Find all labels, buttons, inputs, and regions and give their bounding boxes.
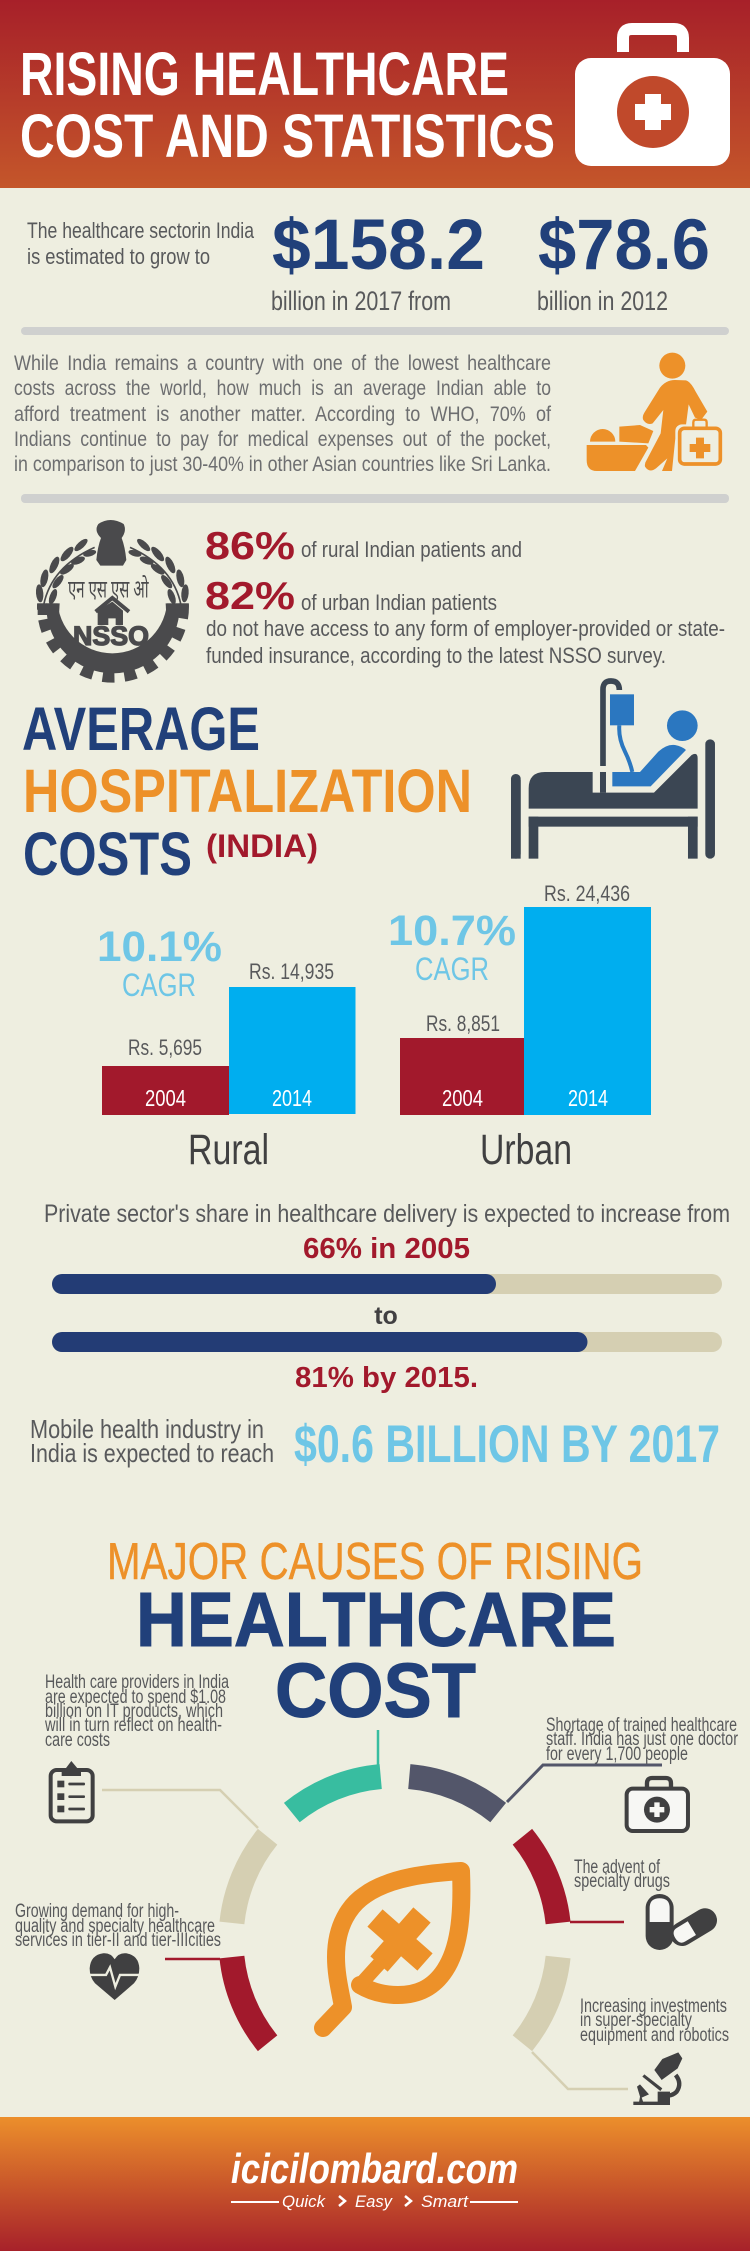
bar chart: urban hospitalization cost: 2014: [568, 1085, 608, 1111]
text: IT products cause: [44, 1672, 229, 1751]
bar chart: rural hospitalization cost: CAGR: [122, 967, 196, 1003]
icon: NSSO logo: NSSO: [73, 621, 149, 651]
tagline: [231, 2192, 518, 2211]
bar chart: urban hospitalization cost: CAGR: [415, 951, 489, 987]
heading: average hospitalization costs: HOSPITALIZATION: [23, 757, 472, 825]
tagline: Easy: [355, 2192, 393, 2211]
text: IT products cause: care costs: [45, 1730, 110, 1751]
text block: healthcare sector growth: billion in 2017 from: [271, 286, 451, 316]
icon: state emblem: [96, 520, 126, 566]
text: growing demand cause: [15, 1901, 221, 1951]
bar chart: urban hospitalization cost: Urban: [480, 1126, 572, 1174]
bar chart: urban hospitalization cost: [388, 881, 651, 1174]
text block: mobile health industry: Mobile health industry in: [30, 1414, 264, 1444]
text block: healthcare sector growth: The healthcare sectorin India: [27, 218, 255, 243]
text block: NSSO insurance statistics: 86%: [205, 525, 295, 568]
text: investments cause: in super-specialty: [580, 2010, 692, 2031]
text: IT products cause: Health care providers in India: [45, 1672, 229, 1693]
text: to: to: [374, 1302, 398, 1330]
panel: footer banner: [0, 2117, 750, 2251]
stat: 66% in 2005: 66% in 2005: [303, 1233, 470, 1265]
bar chart: rural hospitalization cost: Rural: [188, 1126, 269, 1174]
tagline: Quick: [282, 2192, 326, 2211]
bar chart: urban hospitalization cost: 10.7%: [388, 907, 516, 955]
text: investments cause: [580, 1996, 729, 2046]
bar chart: rural hospitalization cost: 2014: [272, 1085, 312, 1111]
diagram: ring of six causes: [102, 1730, 662, 2089]
text block: NSSO insurance statistics: 82%: [205, 575, 295, 618]
bar chart: urban hospitalization cost: 2004: [442, 1085, 483, 1111]
text block: NSSO insurance statistics: of urban Indian patients: [301, 590, 497, 615]
bar chart: rural hospitalization cost: 2004: [145, 1085, 186, 1111]
title: [20, 40, 555, 170]
progress bar: 81 percent: [52, 1332, 722, 1352]
text block: out of pocket paragraph: afford treatment is another matter. According to WHO, 70% of: [14, 403, 551, 426]
text block: mobile health industry: [30, 1414, 720, 1474]
wreath right: [128, 537, 189, 605]
segment: tan, investments: [522, 1957, 628, 2089]
panel: header banner: [0, 0, 750, 188]
brand name: icicilombard.com: [231, 2145, 518, 2192]
segment: red, tier cities demand: [165, 1957, 268, 2043]
icon: first aid case: [575, 29, 730, 166]
icon: person carrying medical case: [587, 353, 724, 471]
icon: pills: [646, 1894, 721, 1950]
text: specialty drugs cause: specialty drugs: [574, 1871, 670, 1892]
text: specialty drugs cause: The advent of: [574, 1857, 661, 1878]
text block: out of pocket paragraph: [14, 352, 551, 476]
stat: 81% by 2015: 81% by 2015.: [295, 1362, 478, 1394]
text block: mobile health industry: India is expected to reach: [30, 1438, 274, 1468]
text: growing demand cause: services in tier-II and tier-IIIcities: [15, 1930, 221, 1951]
bar chart: urban hospitalization cost: Rs. 24,436: [544, 881, 630, 906]
text: growing demand cause: Growing demand for high-: [15, 1901, 179, 1922]
heading: average hospitalization costs: AVERAGE: [22, 695, 260, 763]
text block: healthcare sector growth: is estimated to grow to: [27, 244, 210, 269]
heading: average hospitalization costs: [22, 695, 472, 888]
text block: out of pocket paragraph: costs across the world, how much is an average Indian able to: [14, 377, 551, 400]
text: doctor shortage cause: for every 1,700 people: [546, 1744, 688, 1765]
icon: medical kit: [627, 1778, 688, 1831]
icon: patient in hospital bed: [511, 681, 715, 859]
text block: NSSO insurance statistics: of rural Indian patients and: [301, 537, 522, 562]
text block: healthcare sector growth: [27, 206, 710, 316]
heading: major causes of rising healthcare cost: COST: [275, 1648, 476, 1734]
heading: major causes of rising healthcare cost: [107, 1533, 643, 1734]
text block: NSSO insurance statistics: funded insurance, according to the latest NSSO survey.: [206, 643, 666, 668]
text: IT products cause: are expected to spend $1.08: [45, 1687, 226, 1708]
wreath left: [35, 537, 97, 605]
text block: healthcare sector growth: billion in 2012: [537, 286, 668, 316]
icon: heart with pulse: [90, 1953, 139, 2000]
icon: leaf with medical cross: [323, 1871, 461, 2028]
text: specialty drugs cause: [574, 1857, 670, 1892]
tagline: Smart: [421, 2192, 469, 2211]
segment: slate, doctor shortage: [409, 1765, 662, 1813]
text block: healthcare sector growth: $78.6: [538, 206, 710, 285]
bar chart: rural hospitalization cost: 10.1%: [97, 923, 222, 971]
segment: teal, IT spending: [292, 1730, 381, 1813]
icon: NSSO logo: एन एस एस ओ: [68, 575, 149, 603]
icon: NSSO logo: [35, 520, 189, 678]
segment: tan, IT providers: [102, 1790, 268, 1923]
title: RISING HEALTHCARE: [20, 40, 509, 108]
bar chart: rural hospitalization cost: Rs. 5,695: [128, 1035, 202, 1060]
heading: average hospitalization costs: (INDIA): [206, 828, 318, 864]
bar chart: rural hospitalization cost: Rs. 14,935: [249, 959, 334, 984]
text: IT products cause: will in turn reflect on health-: [44, 1715, 222, 1736]
heading: major causes of rising healthcare cost: HEALTHCARE: [136, 1577, 616, 1663]
text: IT products cause: billion on IT products, which: [45, 1701, 223, 1722]
title: COST AND STATISTICS: [20, 102, 555, 170]
bar chart: urban hospitalization cost: Rs. 8,851: [426, 1011, 500, 1036]
icon: clipboard: [51, 1761, 93, 1821]
text block: out of pocket paragraph: While India remains a country with one of the lowest healthcare: [14, 352, 551, 375]
icon: house: [96, 598, 129, 625]
heading: average hospitalization costs: COSTS: [23, 820, 192, 888]
icon: microscope: [633, 2052, 682, 2105]
text block: out of pocket paragraph: in comparison to just 30-40% in other Asian countries like Sri Lanka.: [14, 453, 551, 476]
progress bar: 66 percent: [52, 1274, 722, 1294]
text block: NSSO insurance statistics: [205, 525, 725, 668]
bar chart: rural hospitalization cost: [97, 923, 356, 1174]
text: doctor shortage cause: [546, 1715, 738, 1765]
text: growing demand cause: quality and specialty healthcare: [15, 1916, 215, 1937]
segment: red, specialty drugs: [522, 1837, 624, 1923]
text block: healthcare sector growth: $158.2: [272, 206, 485, 285]
text block: out of pocket paragraph: Indians continue to pay for medical expenses out of the pocket,: [14, 428, 551, 451]
